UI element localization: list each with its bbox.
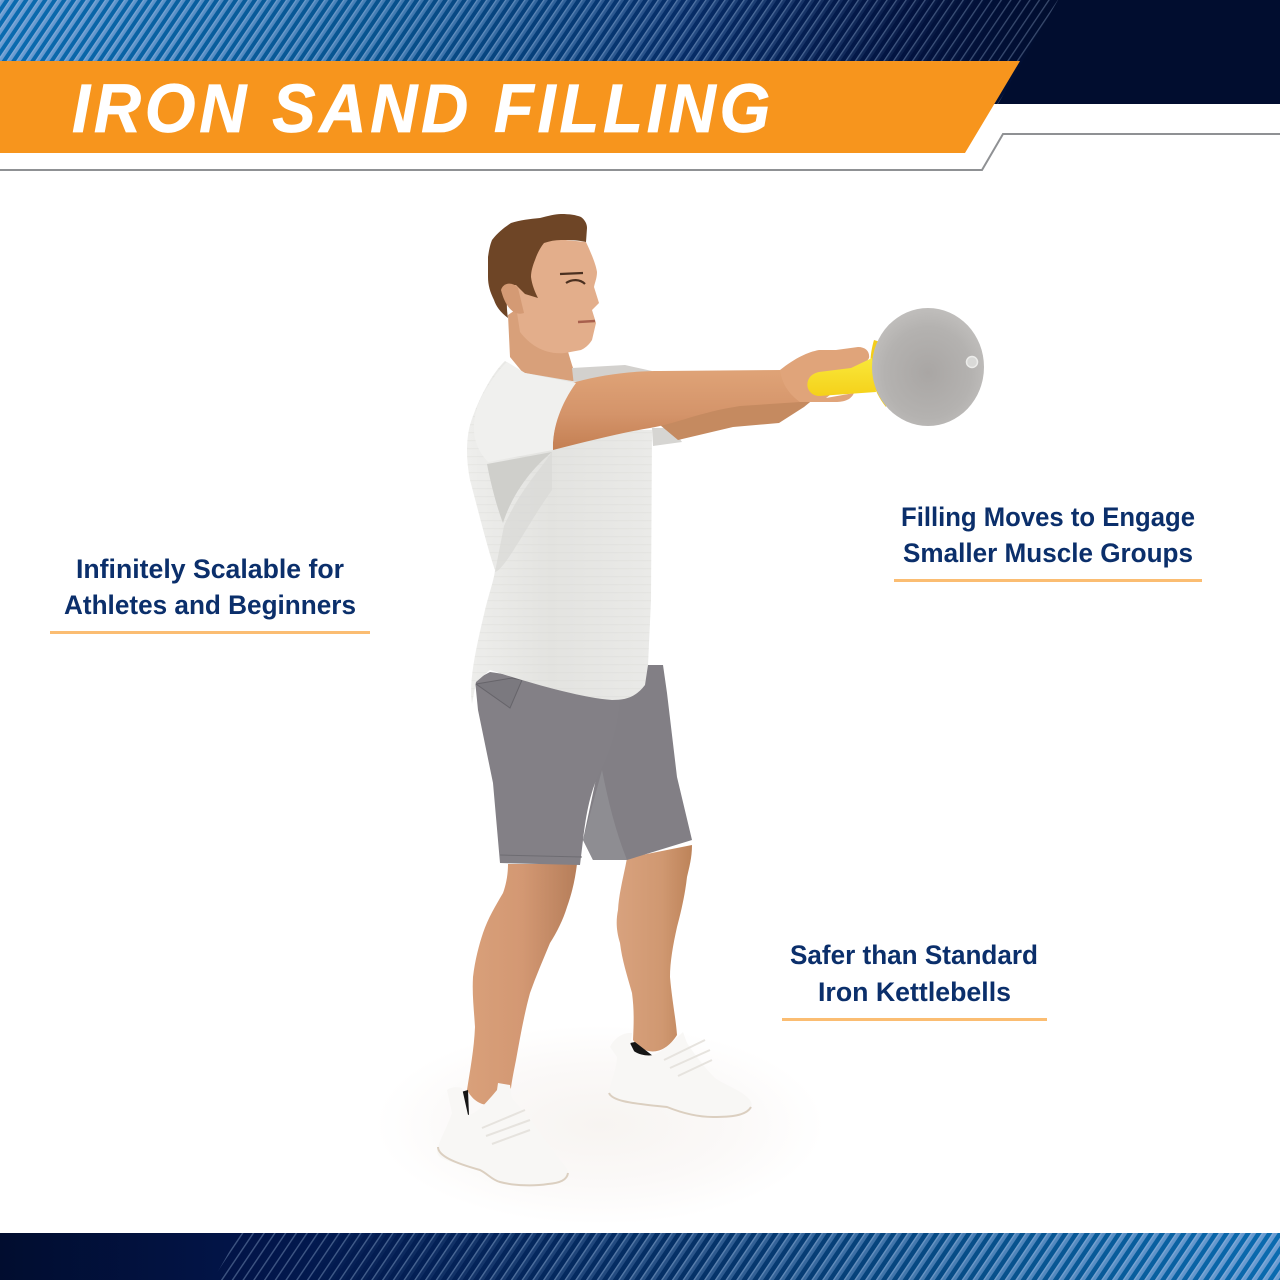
orange title band xyxy=(0,61,1020,153)
callout: infinitely scalable: Infinitely Scalable for xyxy=(76,554,344,584)
shorts inner shade xyxy=(583,770,627,860)
far leg xyxy=(617,845,692,1051)
floor shadow xyxy=(375,1025,825,1225)
far shoe xyxy=(609,1032,752,1117)
callout: filling moves: Filling Moves to Engage xyxy=(901,502,1195,532)
eye xyxy=(560,273,585,284)
kettlebell yellow base xyxy=(870,340,895,407)
far arm xyxy=(660,392,815,440)
callout: infinitely scalable xyxy=(50,554,370,634)
shorts far leg xyxy=(583,665,692,860)
hand xyxy=(780,347,869,402)
near arm xyxy=(553,370,805,450)
shorts hem xyxy=(500,855,582,857)
shorts xyxy=(475,665,692,865)
kettlebell ball xyxy=(872,308,984,426)
callout: safer: Iron Kettlebells xyxy=(818,977,1011,1007)
far sock xyxy=(630,1042,653,1056)
neck xyxy=(508,300,578,382)
header banner xyxy=(0,0,1280,170)
near sock xyxy=(460,1090,469,1115)
kettlebell valve xyxy=(966,356,978,368)
footer band xyxy=(0,1233,1280,1280)
far shoulder of shirt xyxy=(572,365,652,400)
near sleeve xyxy=(474,362,576,462)
near shoe xyxy=(437,1083,568,1185)
near leg xyxy=(467,864,577,1105)
shirt xyxy=(467,361,652,704)
mouth xyxy=(578,321,595,322)
kettlebell handle xyxy=(807,358,876,396)
title: IRON SAND FILLING xyxy=(72,70,774,147)
callout: filling moves: Smaller Muscle Groups xyxy=(903,538,1193,568)
head xyxy=(488,214,599,353)
callout: safer: Safer than Standard xyxy=(790,940,1038,970)
hair xyxy=(488,214,587,318)
shoe laces xyxy=(482,1040,712,1144)
far sleeve xyxy=(652,428,682,446)
shorts pocket xyxy=(476,678,522,708)
kettlebell xyxy=(807,308,984,426)
shirt ribbing xyxy=(467,361,652,704)
callout: filling moves xyxy=(894,502,1202,582)
side fold xyxy=(495,452,552,572)
shorts near leg xyxy=(475,672,620,865)
ear xyxy=(501,284,524,314)
underarm panel xyxy=(487,452,552,523)
man with kettlebell xyxy=(437,214,984,1185)
callout: infinitely scalable: Athletes and Beginners xyxy=(64,590,356,620)
callout: safer xyxy=(782,940,1047,1021)
face xyxy=(515,238,599,353)
